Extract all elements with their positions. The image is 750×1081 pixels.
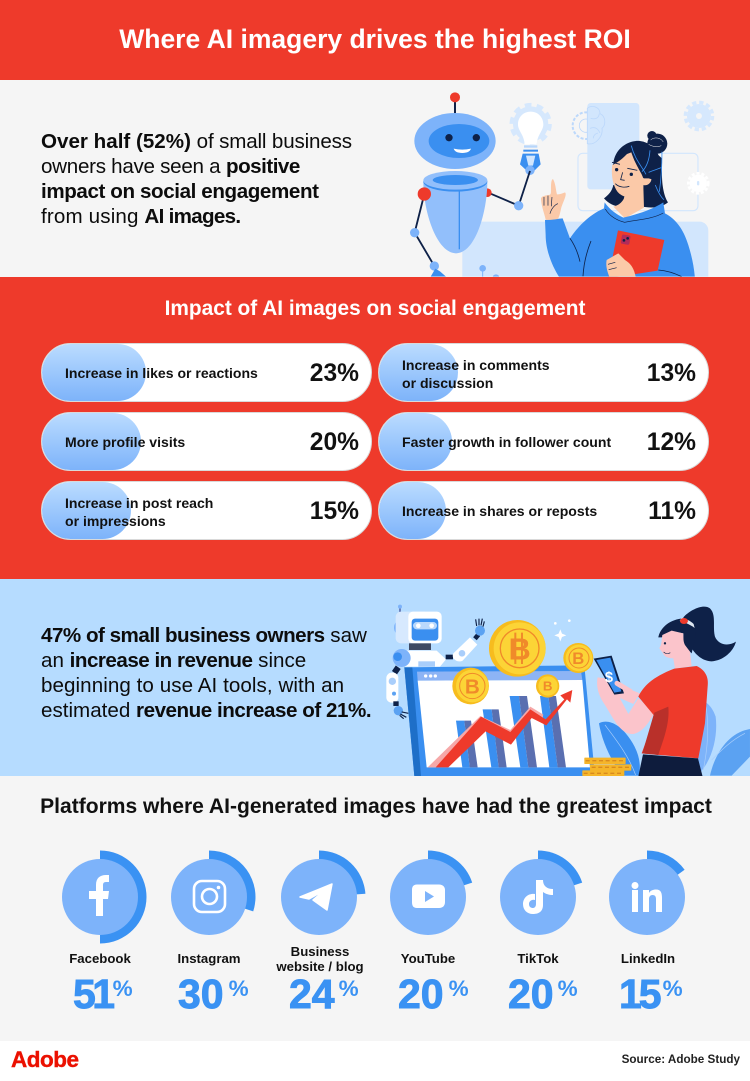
icon: LinkedIn xyxy=(632,882,662,912)
panel: platforms xyxy=(0,776,750,1041)
hair xyxy=(658,618,696,653)
platform: Facebook chart xyxy=(62,850,146,944)
revenue text: beginning to use AI tools, with an xyxy=(41,674,344,697)
stat pill: followers: 12% xyxy=(647,429,696,456)
icon: coin left xyxy=(452,668,489,704)
label: TikTok: TikTok xyxy=(517,951,559,966)
title: Where AI imagery drives the highest ROI xyxy=(119,24,631,54)
platform: TikTok chart xyxy=(500,850,582,935)
illustration: robot, revenue chart, coins and woman with phone xyxy=(386,604,750,776)
face and neck xyxy=(660,631,692,669)
icon: Instagram xyxy=(194,881,225,912)
platform: LinkedIn chart xyxy=(609,850,685,935)
revenue text xyxy=(41,624,371,722)
trend arrow xyxy=(428,690,572,767)
pointing hand xyxy=(541,179,566,220)
label: YouTube: YouTube xyxy=(401,951,455,966)
hair back xyxy=(604,141,668,207)
label: Business website / blog: Business xyxy=(291,944,349,959)
stat pill: comments: 13% xyxy=(647,360,696,387)
fringe xyxy=(613,142,662,182)
intro text xyxy=(41,130,352,228)
platform: YouTube chart xyxy=(390,850,472,935)
hoodie xyxy=(545,202,695,278)
panel: revenue xyxy=(0,579,750,776)
coin stack xyxy=(582,758,631,776)
woman with phone xyxy=(594,607,736,777)
value: Business website 24%: 24% xyxy=(289,971,359,1017)
stat pill: shares: Increase in shares or reposts xyxy=(402,503,597,519)
bar chart xyxy=(456,696,566,767)
icon: coin left: B xyxy=(465,675,480,698)
platform: Instagram chart xyxy=(171,850,255,935)
stat pill: comments: Increase in comments xyxy=(402,357,550,373)
neck xyxy=(613,185,644,218)
stat pill: profile visits xyxy=(41,412,372,471)
hair bun xyxy=(647,134,667,154)
stat pill: reach: Increase in post reach xyxy=(65,495,213,511)
ponytail xyxy=(683,607,736,661)
stat pill: followers xyxy=(378,412,709,471)
label: Business website / blog: website / blog xyxy=(276,959,364,974)
panel: social engagement intro xyxy=(0,80,750,277)
stat pill: likes: Increase in likes or reactions xyxy=(65,365,258,381)
woman xyxy=(541,131,695,278)
value: Instagram 30%: 30% xyxy=(178,971,249,1017)
label: Business website / blog xyxy=(276,944,364,974)
phone xyxy=(594,656,624,695)
panel: impact of AI images on social engagement xyxy=(0,277,750,579)
stat pill: likes: 23% xyxy=(310,360,359,387)
title banner xyxy=(0,0,750,80)
stat pill: comments xyxy=(378,343,709,402)
icon: light bulb xyxy=(512,105,550,175)
tablet xyxy=(608,230,664,278)
label: Facebook: Facebook xyxy=(69,951,131,966)
label: LinkedIn: LinkedIn xyxy=(621,951,675,966)
section heading: Impact of AI images on social engagement xyxy=(165,297,585,320)
icon: TikTok xyxy=(523,880,553,914)
stat pill: followers: Faster growth in follower count xyxy=(402,434,611,450)
stat pill: reach: 15% xyxy=(310,498,359,525)
revenue text: estimated revenue increase of 21%. xyxy=(41,699,371,722)
illustration: robot and woman with tablet xyxy=(410,92,714,277)
icon: gear top right xyxy=(685,102,713,130)
arm xyxy=(597,677,654,734)
icon: coin large: B xyxy=(509,632,531,666)
holding hand xyxy=(606,253,636,278)
trousers xyxy=(638,754,703,777)
icon: brain and gear xyxy=(573,106,605,144)
icon: coin large xyxy=(489,620,546,677)
section heading: Platforms where AI-generated images have had the greatest impact xyxy=(40,795,712,818)
revenue text: an increase in revenue since xyxy=(41,649,306,672)
footer xyxy=(0,1041,750,1081)
source note: Source: Adobe Study xyxy=(622,1053,740,1066)
value: Facebook 51%: 51% xyxy=(73,971,133,1017)
revenue text: 47% of small business owners saw xyxy=(41,624,367,647)
Adobe logo wordmark: Adobe xyxy=(11,1047,78,1072)
sparkles xyxy=(554,619,571,641)
robot xyxy=(410,92,530,281)
stat pill: reach xyxy=(41,481,372,540)
intro text: owners have seen a positive xyxy=(41,155,300,178)
icon: coin small xyxy=(536,674,559,698)
icon: paper plane xyxy=(300,884,332,910)
stat pill: shares: 11% xyxy=(648,498,696,525)
platform: Business website chart xyxy=(281,850,365,935)
intro text: from using AI images. xyxy=(41,205,240,228)
shirt xyxy=(638,666,708,758)
woman with phone: $ xyxy=(605,670,613,686)
value: YouTube 20%: 20% xyxy=(398,971,469,1017)
intro text: impact on social engagement xyxy=(41,180,319,203)
icon: white gear xyxy=(688,173,708,193)
icon: coin right xyxy=(563,643,593,673)
chart monitor xyxy=(404,665,595,776)
label: Instagram: Instagram xyxy=(177,951,241,966)
icon: Facebook xyxy=(89,875,109,916)
intro text: Over half (52%) of small business xyxy=(41,130,352,153)
icon: YouTube xyxy=(412,884,445,908)
value: LinkedIn 15%: 15% xyxy=(619,971,683,1017)
value: TikTok 20%: 20% xyxy=(508,971,578,1017)
stat pill: profile visits: 20% xyxy=(310,429,359,456)
robot xyxy=(386,605,485,719)
stat pill: comments: or discussion xyxy=(402,374,493,390)
icon: coin right: B xyxy=(572,649,584,668)
stat pill: reach: or impressions xyxy=(65,512,166,528)
background panels xyxy=(462,103,708,285)
face xyxy=(612,152,651,197)
stat pill: profile visits: More profile visits xyxy=(65,434,185,450)
stat pill: likes xyxy=(41,343,372,402)
leaves xyxy=(599,702,750,776)
icon: coin small: B xyxy=(543,679,553,694)
stat pill: shares xyxy=(378,481,709,540)
